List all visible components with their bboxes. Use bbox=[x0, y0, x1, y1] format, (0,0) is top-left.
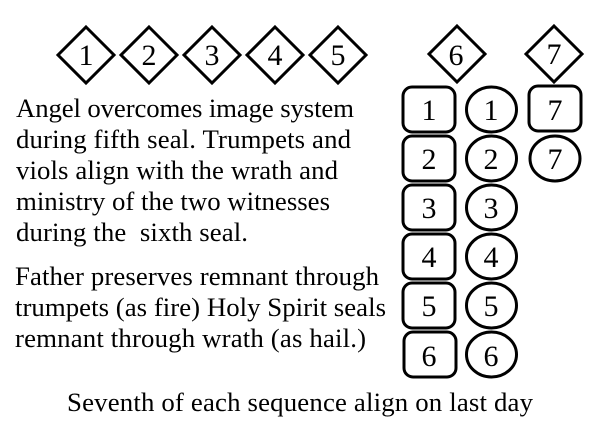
caption: seventh of each sequence: Seventh of each sequence align on last day bbox=[67, 387, 534, 417]
diamond 6 bbox=[429, 26, 485, 82]
diamond 2: 2 bbox=[142, 39, 156, 72]
diamond 6: 6 bbox=[448, 39, 464, 72]
vial 2: 2 bbox=[484, 143, 498, 176]
trumpet 2: 2 bbox=[422, 143, 436, 176]
text block: angel and image system: ministry of the two witnesses bbox=[16, 186, 330, 216]
vial 3: 3 bbox=[484, 192, 498, 225]
diamond 7 bbox=[526, 26, 582, 82]
seventh trumpet rounded square: 7 bbox=[548, 94, 562, 127]
seventh vial circle: 7 bbox=[548, 143, 562, 176]
diamond 2 bbox=[121, 27, 177, 83]
trumpet 6: 6 bbox=[422, 340, 436, 373]
vial 4 bbox=[466, 234, 516, 279]
trumpet 1 bbox=[403, 87, 455, 132]
trumpet 5: 5 bbox=[422, 290, 436, 323]
diamond 5 bbox=[310, 27, 366, 83]
vial 5: 5 bbox=[484, 290, 498, 323]
trumpet 5 bbox=[403, 283, 455, 328]
seal diamonds row bbox=[58, 26, 582, 83]
trumpet 4: 4 bbox=[422, 241, 436, 274]
trumpet 6 bbox=[404, 332, 456, 377]
text block: father and holy spirit: remnant through wrath (as hail.) bbox=[15, 323, 366, 353]
vial 1 bbox=[466, 87, 516, 132]
vial 5 bbox=[466, 283, 516, 328]
diamond 5: 5 bbox=[330, 39, 346, 72]
vials column of circles bbox=[466, 87, 516, 377]
text block: angel and image system: Angel overcomes image system bbox=[16, 93, 354, 123]
trumpet 2 bbox=[403, 136, 455, 181]
trumpet 3: 3 bbox=[422, 192, 436, 225]
text block: father and holy spirit bbox=[15, 261, 386, 353]
vial 3 bbox=[466, 185, 516, 230]
diamond 7: 7 bbox=[546, 38, 562, 71]
text block: father and holy spirit: Father preserves remnant through bbox=[15, 261, 380, 291]
diamond 3: 3 bbox=[204, 39, 220, 72]
vial 6 bbox=[466, 332, 516, 377]
trumpet 4 bbox=[403, 234, 455, 279]
seventh trumpet rounded square bbox=[529, 86, 581, 131]
vial 1: 1 bbox=[484, 94, 498, 127]
trumpet 1: 1 bbox=[422, 94, 436, 127]
diamond 4 bbox=[247, 27, 303, 83]
diamond 4: 4 bbox=[268, 39, 282, 72]
text block: angel and image system bbox=[16, 93, 354, 247]
trumpets column of rounded squares bbox=[403, 87, 456, 377]
trumpet 3 bbox=[403, 185, 455, 230]
diamond 1: 1 bbox=[78, 39, 94, 72]
seventh vial circle bbox=[530, 136, 580, 181]
vial 4: 4 bbox=[484, 241, 498, 274]
diamond 1 bbox=[58, 27, 114, 83]
text block: angel and image system: viols align with the wrath and bbox=[16, 155, 339, 185]
vial 2 bbox=[466, 136, 516, 181]
text block: angel and image system: during fifth seal. Trumpets and bbox=[16, 124, 352, 154]
vial 6: 6 bbox=[484, 340, 498, 373]
text block: father and holy spirit: trumpets (as fire) Holy Spirit seals bbox=[15, 292, 386, 322]
text block: angel and image system: during the sixth seal. bbox=[16, 217, 248, 247]
diamond 3 bbox=[184, 27, 240, 83]
